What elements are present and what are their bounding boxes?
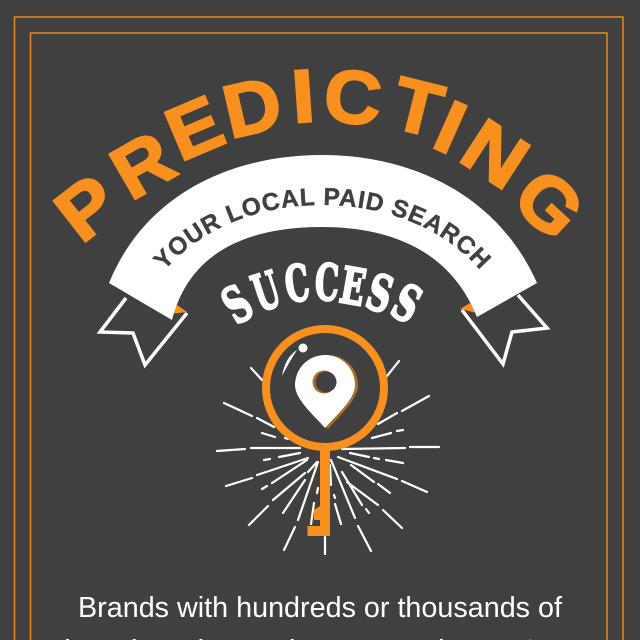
title: PREDICTING: P	[39, 158, 134, 258]
heading: SUCCESS: S	[211, 273, 263, 336]
ribbon banner	[96, 155, 550, 368]
lens highlight	[282, 350, 297, 376]
intro text	[64, 592, 563, 640]
ribbon tail: right	[462, 295, 547, 364]
heading: SUCCESS: E	[336, 256, 370, 318]
title: PREDICTING: D	[215, 60, 290, 155]
heading: SUCCESS: C	[314, 252, 340, 313]
heading: SUCCESS: S	[359, 262, 400, 325]
heading: SUCCESS: C	[281, 252, 313, 314]
title: PREDICTING: R	[97, 115, 188, 216]
sunburst rays	[217, 361, 439, 554]
heading: SUCCESS	[211, 252, 431, 336]
title: PREDICTING: I	[289, 54, 317, 139]
icon: location pin	[295, 355, 358, 429]
title: PREDICTING: I	[423, 84, 478, 170]
ribbon fold: right	[460, 303, 477, 313]
title: PREDICTING: T	[384, 61, 451, 154]
heading: SUCCESS: S	[382, 272, 431, 335]
key ring	[266, 329, 384, 447]
key shaft and teeth	[308, 448, 330, 536]
ribbon fold: left	[170, 305, 187, 314]
icon: key with magnifier ring	[266, 329, 384, 536]
title: PREDICTING: N	[448, 103, 543, 205]
intro text: Brands with hundreds or thousands of	[78, 592, 563, 624]
title: PREDICTING: E	[154, 80, 235, 177]
ribbon tail: left	[100, 298, 187, 365]
title: PREDICTING: G	[498, 153, 600, 256]
title: PREDICTING: C	[320, 53, 385, 142]
ribbon text: YOUR LOCAL PAID SEARCH	[152, 188, 492, 270]
ribbon band	[109, 155, 537, 320]
title: PREDICTING	[39, 53, 600, 258]
heading: SUCCESS: U	[245, 260, 287, 324]
